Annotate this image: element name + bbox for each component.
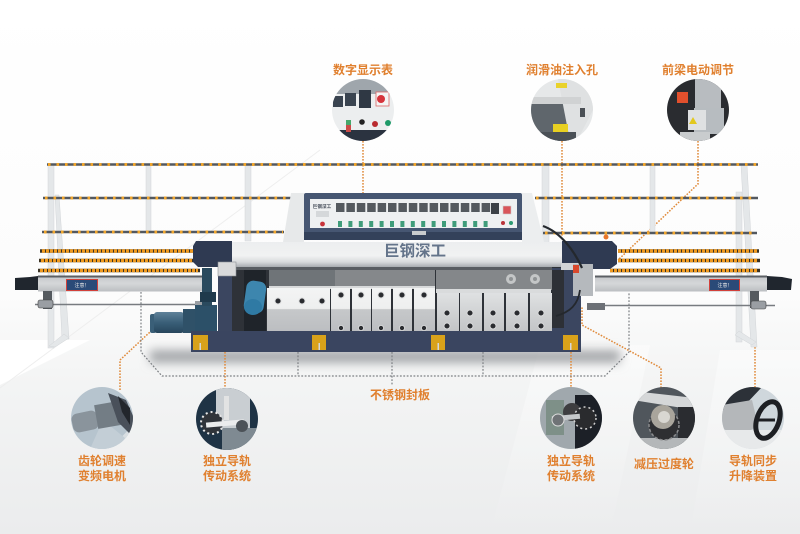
adjustment knobs <box>275 292 544 331</box>
circle: transmission system right <box>540 387 602 449</box>
label: transmission left: 传动系统 <box>203 468 251 483</box>
circle: oil hole <box>531 79 593 141</box>
label: stainless cover: 不锈钢封板 <box>370 387 430 402</box>
label: lifting device: 升降装置 <box>729 468 777 483</box>
grinding unit strips <box>269 270 552 293</box>
brand name: 巨钢深工 <box>384 242 446 260</box>
glass support frame <box>38 164 760 348</box>
control panel <box>283 193 544 242</box>
label: lifting device: 导轨同步 <box>729 454 777 468</box>
circle: pressure relief wheel <box>633 387 695 449</box>
label: transmission right: 传动系统 <box>547 468 595 483</box>
circle: lifting device <box>722 387 785 449</box>
leader lines <box>120 141 755 390</box>
left conveyor beam <box>15 276 205 309</box>
circle: front beam adjustment <box>667 79 729 141</box>
right conveyor beam <box>587 276 792 310</box>
machine floor shadow <box>150 350 620 363</box>
label: transmission left: 独立导轨 <box>203 454 251 468</box>
blue spindle motor <box>243 280 267 315</box>
left dark housing <box>193 241 232 267</box>
label: digital display: 数字显示表 <box>333 62 393 77</box>
label: gear motor: 变频电机 <box>78 468 126 483</box>
right adjustment box <box>573 264 593 296</box>
base and frame <box>191 266 581 352</box>
label: front beam adjustment: 前梁电动调节 <box>662 62 734 77</box>
label: relief wheel: 减压过度轮 <box>634 456 694 471</box>
label: transmission right: 独立导轨 <box>547 454 595 468</box>
upper housing beam <box>193 226 617 316</box>
orange conveyor bars <box>38 251 760 270</box>
right dark housing <box>562 241 617 269</box>
yellow feet <box>193 335 578 350</box>
panel face <box>310 199 517 228</box>
circle: gear motor <box>70 387 134 449</box>
frame posts <box>48 165 757 348</box>
panel indicator buttons <box>338 221 513 227</box>
left conveyor beam: 注意！ <box>74 282 90 289</box>
label: oil hole: 润滑油注入孔 <box>526 62 598 77</box>
control panel: 巨钢深工 <box>313 203 332 210</box>
digital displays <box>336 203 499 214</box>
right conveyor beam: 注意！ <box>717 282 733 289</box>
circle: transmission system left <box>196 388 258 450</box>
grinding head modules <box>267 288 552 331</box>
glass rails <box>42 164 758 233</box>
label: gear motor: 齿轮调速 <box>78 454 126 468</box>
gear motor <box>150 268 217 333</box>
circle: digital display <box>332 79 394 141</box>
